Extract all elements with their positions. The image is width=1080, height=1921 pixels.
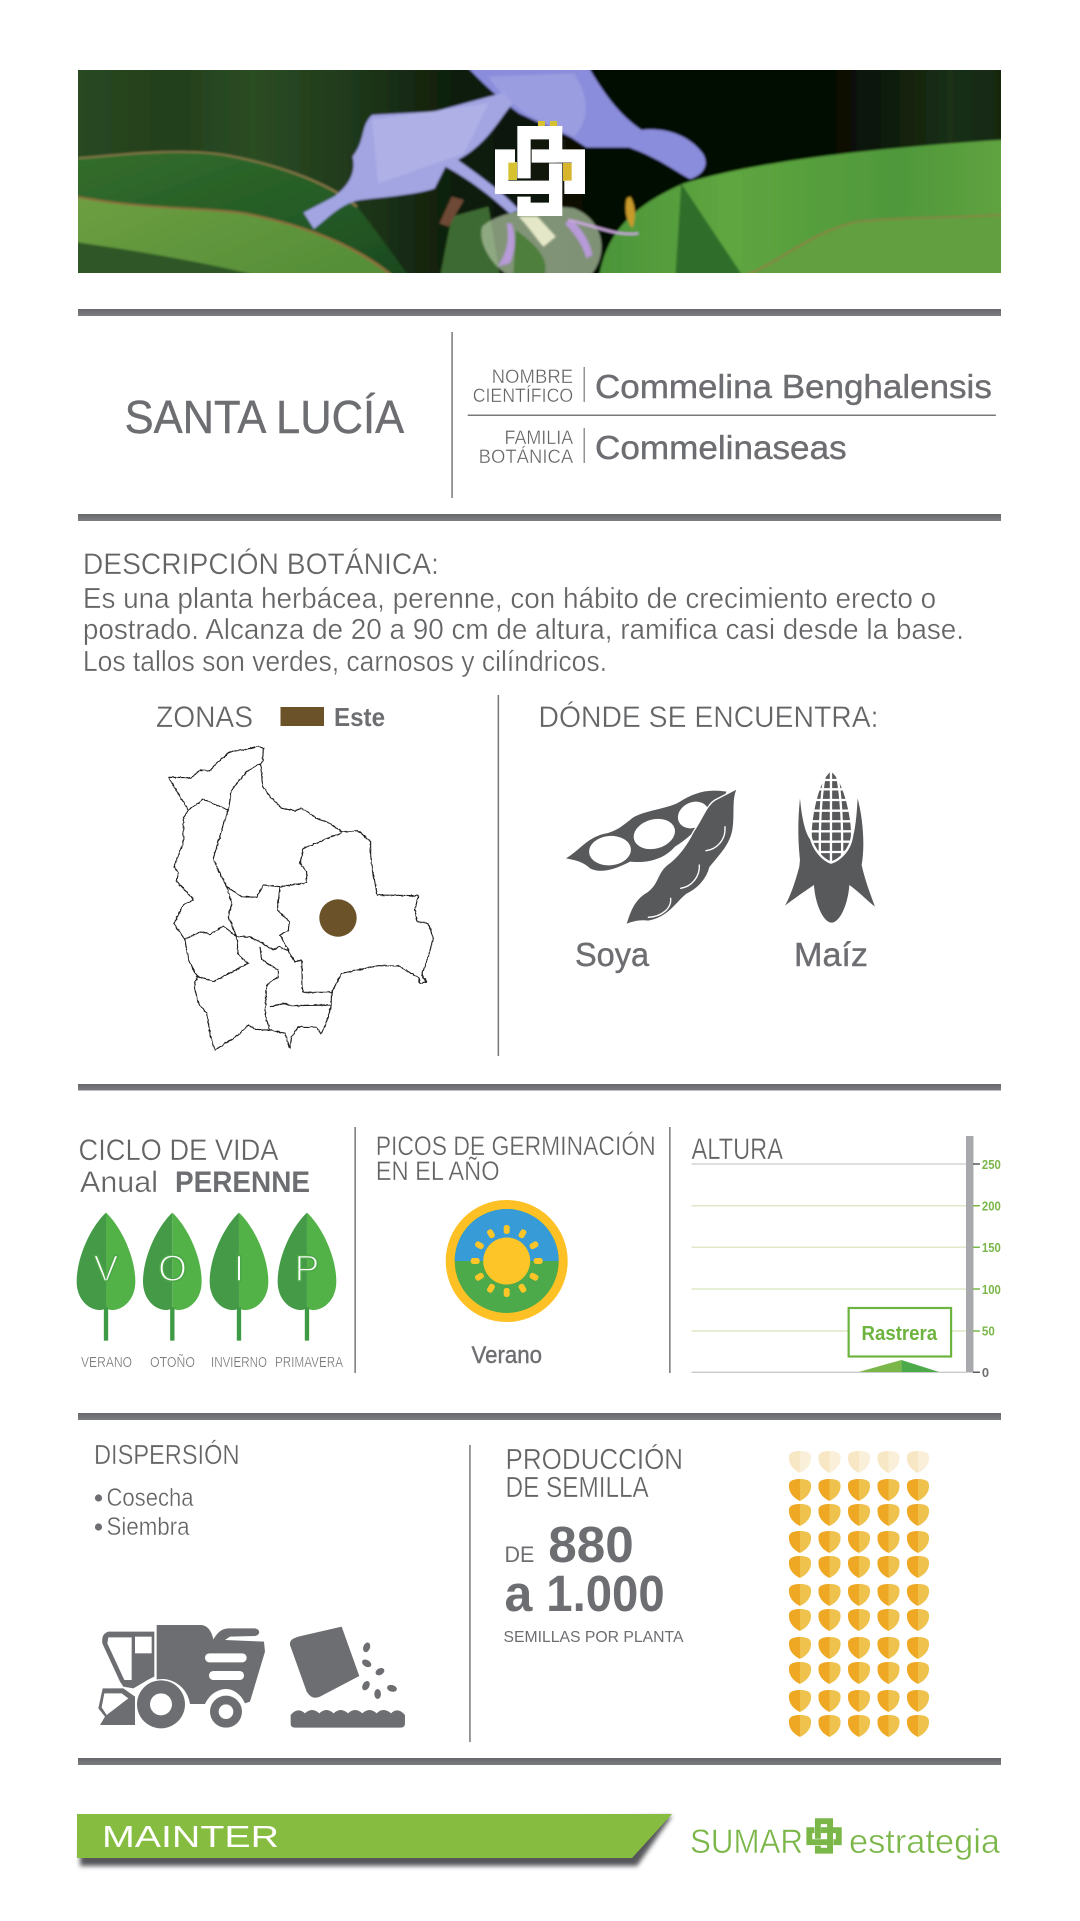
season labels: INVIERNO [211,1354,267,1371]
label: verano: Verano [472,1342,542,1369]
figure: de 880 a 1.000: a [505,1565,533,1622]
icon: soybean pods [566,788,738,925]
map marker: este [319,899,357,937]
figure: de 880 a 1.000 [505,1516,665,1622]
footer logo: sumar estrategia: SUMAR [690,1823,803,1861]
heading: dónde se encuentra: DÓNDE SE ENCUENTRA: [538,701,878,734]
label: nombre científico: CIENTÍFICO [473,386,573,407]
icon: corn cob [785,770,875,923]
label: familia botánica: FAMILIA [505,428,574,449]
footer logo: sumar estrategia: estrategia [849,1823,1000,1861]
panel: producción de semilla [504,1443,929,1737]
pictogram: seed kernels [789,1451,929,1737]
icon: summer sun badge [446,1200,568,1322]
panel: ciclo de vida [77,1134,343,1371]
heading: producción de semilla [506,1443,683,1504]
axis labels: 0 [982,1365,989,1380]
heading: producción de semilla: PRODUCCIÓN [506,1443,683,1476]
label: anual: Anual [80,1166,158,1199]
season labels: VERANO [81,1354,132,1371]
icon: white logo on photo [502,133,578,209]
heading: altura: ALTURA [692,1133,783,1166]
panel: zonas [156,701,433,1050]
heading: dispersión: DISPERSIÓN [94,1439,240,1470]
axis labels: 200 [982,1198,1001,1214]
leaf: otoño [143,1213,202,1341]
panel: picos de germinación [376,1130,656,1369]
heading: ciclo de vida: CICLO DE VIDA [78,1134,278,1167]
season labels: OTOÑO [150,1354,195,1371]
label: soya: Soya [575,936,650,973]
scientific name: Commelina Benghalensis [595,368,992,405]
axis labels: 150 [982,1240,1001,1255]
divider bar 3 [78,1084,1001,1090]
label: familia botánica: BOTÁNICA [479,447,574,468]
panel: altura chart [692,1133,1001,1380]
legend swatch: este [280,707,324,726]
heading: zonas: ZONAS [156,701,253,734]
divider bar 1 [78,309,1001,316]
text block: descripción botánica: Es una planta herbácea, perenne, con hábito de crecimiento erecto o [83,583,936,615]
icon: green logo mark [809,1821,839,1851]
panel: name and taxonomy [125,332,996,498]
text block: descripción botánica: Los tallos son verdes, carnosos y cilíndricos. [83,646,607,678]
icon: sowing seeds [290,1627,405,1728]
list: cosecha, siembra [95,1484,194,1541]
text block: descripción botánica: postrado. Alcanza de 20 a 90 cm de altura, ramifica casi desde la base. [83,614,964,646]
text block: descripción botánica: DESCRIPCIÓN BOTÁNICA: [83,548,439,581]
heading: producción de semilla: DE SEMILLA [506,1472,649,1504]
map of Bolivia [168,746,433,1050]
season letters: V [94,1248,119,1289]
plant height triangle [859,1360,939,1372]
season letters: I [234,1248,244,1289]
family name: Commelinaseas [595,429,847,466]
figure: de 880 a 1.000: 1.000 [546,1565,665,1622]
axis labels: 250 [982,1157,1001,1172]
season labels [81,1354,343,1371]
chart axis [966,1136,973,1372]
season letters [94,1248,319,1289]
leaf: invierno [210,1213,268,1341]
season letters: O [158,1248,187,1289]
text block: descripción botánica [83,548,964,678]
leaf: verano [77,1213,135,1341]
label: nombre científico [473,367,573,407]
callout: rastrera [849,1308,951,1356]
label: familia botánica [479,428,574,468]
divider bar 4 [78,1413,1001,1420]
panel: dónde se encuentra [538,701,878,973]
callout: rastrera: Rastrera [862,1323,938,1345]
axis labels: 50 [982,1323,995,1339]
divider bar 5 [78,1758,1001,1765]
panel: dispersión [94,1439,405,1728]
figure: de 880 a 1.000: DE [505,1542,534,1567]
label: nombre científico: NOMBRE [492,367,573,388]
figure: de 880 a 1.000: 880 [548,1516,634,1573]
heading: picos de germinación [376,1130,656,1186]
footer logo: sumar estrategia [690,1821,1000,1861]
axis labels: 100 [982,1282,1001,1297]
heading: picos de germinación: PICOS DE GERMINACIÓN [376,1130,656,1161]
leaf: primavera [278,1213,336,1341]
list: cosecha, siembra: Cosecha [106,1484,194,1512]
footer banner: mainter [77,1814,672,1866]
legend label: este: Este [334,702,385,732]
label: semillas por planta: SEMILLAS POR PLANTA [504,1629,684,1646]
icon: combine harvester [98,1625,265,1728]
label: maíz: Maíz [794,936,868,973]
footer banner: mainter: MAINTER [102,1819,279,1854]
season labels: PRIMAVERA [275,1354,343,1371]
heading: picos de germinación: EN EL AÑO [376,1155,500,1186]
season letters: P [295,1248,319,1289]
header photo: flower and leaves [78,70,1001,273]
label: perenne: PERENNE [175,1166,310,1199]
divider bar 2 [78,514,1001,521]
list: cosecha, siembra: Siembra [106,1513,190,1541]
axis labels [982,1157,1001,1380]
title: Santa Lucía: SANTA LUCÍA [125,391,404,443]
